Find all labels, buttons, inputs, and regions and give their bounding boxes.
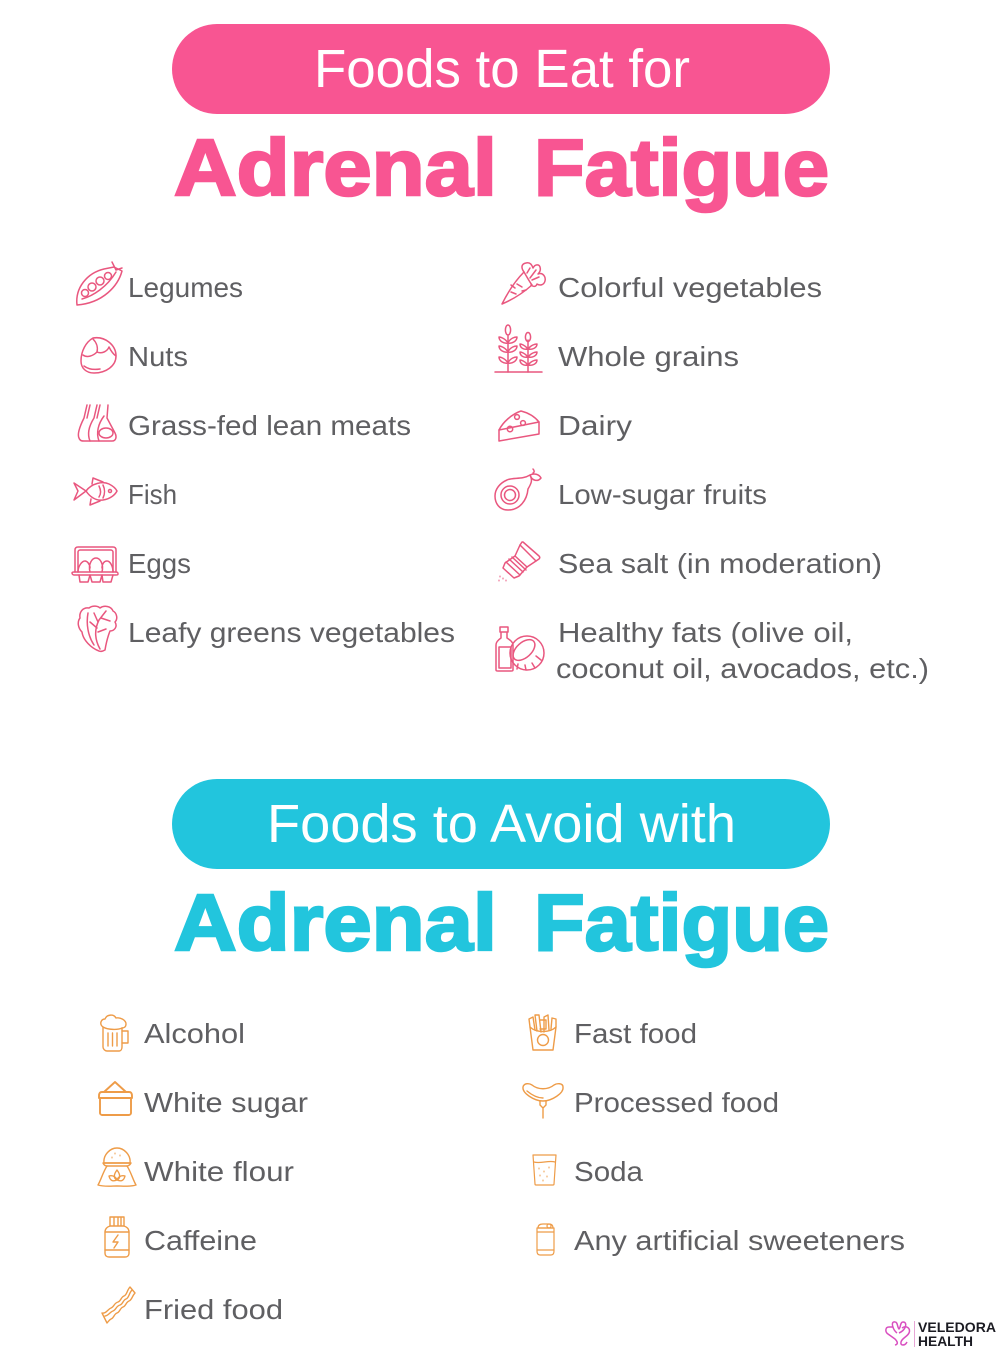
- item: fish: [74, 478, 177, 510]
- item: nuts: [81, 338, 188, 373]
- item: whole grains: Whole grains: [558, 341, 739, 372]
- icon: bacon: [102, 1287, 135, 1323]
- item: colorful vegetables: Colorful vegetables: [558, 272, 822, 303]
- item: white sugar: [99, 1082, 308, 1118]
- item: legumes: Legumes: [128, 272, 243, 303]
- item: white flour: White flour: [144, 1156, 294, 1187]
- item: fish: Fish: [128, 479, 177, 510]
- item: low-sugar fruits: Low-sugar fruits: [558, 479, 767, 510]
- item: artificial sweeteners: Any artificial sweeteners: [574, 1225, 905, 1256]
- item: leafy greens vegetables: [78, 606, 455, 651]
- text: logo wordmark: VELEDORA: [918, 1319, 996, 1335]
- divider: [914, 1321, 916, 1347]
- heading pill: foods to eat: [172, 24, 830, 114]
- item: alcohol: [101, 1015, 245, 1051]
- icon: cheese wedge: [499, 411, 539, 441]
- text: logo wordmark: HEALTH: [918, 1333, 973, 1349]
- title: adrenal fatigue blue: Fatigue: [534, 878, 829, 967]
- heading pill: foods to avoid: [172, 779, 830, 869]
- icon: soda glass: [533, 1155, 556, 1185]
- logo: Veledora Health: [886, 1319, 996, 1349]
- item: fast food: [529, 1015, 697, 1050]
- icon: fries box: [529, 1015, 556, 1050]
- icon: sausage on fork: [523, 1084, 563, 1118]
- item: caffeine: Caffeine: [144, 1225, 257, 1256]
- text: healthy fats label: Healthy fats (olive oil,: [558, 617, 853, 648]
- item: healthy fats: [496, 617, 929, 684]
- item: soda: Soda: [574, 1156, 643, 1187]
- item: white flour: [98, 1148, 294, 1187]
- panel: foods to eat: [72, 24, 929, 684]
- item: sea salt: [499, 542, 882, 581]
- icon: egg carton: [72, 547, 118, 582]
- icon: oil bottle and coconut: [496, 627, 544, 671]
- item: eggs: Eggs: [128, 548, 191, 579]
- icon: pea pod: [77, 262, 122, 305]
- item: processed food: Processed food: [574, 1087, 779, 1118]
- item: nuts: Nuts: [128, 341, 188, 372]
- item: whole grains: [495, 325, 739, 372]
- item: alcohol: Alcohol: [144, 1018, 245, 1049]
- item: dairy: [499, 410, 632, 441]
- item: fast food: Fast food: [574, 1018, 697, 1049]
- icon: lettuce leaf: [78, 606, 117, 651]
- icon: sugar box: [99, 1082, 132, 1115]
- item: dairy: Dairy: [558, 410, 632, 441]
- icon: sweetener jar: [537, 1224, 554, 1255]
- item: colorful vegetables: [502, 263, 822, 304]
- icon: logo mark: [886, 1322, 909, 1345]
- item: fried food: Fried food: [144, 1294, 283, 1325]
- item: sea salt: Sea salt (in moderation): [558, 548, 882, 579]
- item: fried food: [102, 1287, 283, 1325]
- text: logo wordmark: [918, 1319, 996, 1349]
- item: white sugar: White sugar: [144, 1087, 308, 1118]
- icon: hazelnut: [81, 338, 116, 373]
- item: low-sugar fruits: [495, 469, 767, 510]
- icon: fish: [74, 478, 117, 505]
- title: adrenal fatigue pink: Adrenal: [174, 123, 497, 212]
- item: grass-fed lean meats: Grass-fed lean meats: [128, 410, 411, 441]
- icon: wheat stalks: [495, 325, 542, 372]
- item: soda: [533, 1155, 643, 1187]
- item: grass-fed lean meats: [78, 405, 411, 441]
- title: adrenal fatigue pink: [174, 123, 829, 212]
- title: adrenal fatigue blue: [174, 878, 829, 967]
- item: caffeine: [105, 1217, 257, 1257]
- icon: avocado: [495, 469, 541, 510]
- heading pill: foods to eat: Foods to Eat for: [314, 39, 690, 99]
- icon: flour sack: [98, 1148, 136, 1186]
- heading pill: foods to avoid: Foods to Avoid with: [267, 794, 736, 854]
- icon: salt shaker: [499, 542, 540, 581]
- icon: caffeine pill bottle: [105, 1217, 129, 1257]
- text: healthy fats label: [556, 617, 929, 684]
- title: adrenal fatigue pink: Fatigue: [534, 123, 829, 212]
- item: eggs: [72, 547, 191, 582]
- text: healthy fats label: coconut oil, avocados, etc.): [556, 653, 929, 684]
- icon: rack of meat: [78, 405, 116, 441]
- panel: foods to avoid: [98, 779, 905, 1325]
- icon: carrot: [502, 263, 545, 304]
- item: processed food: [523, 1084, 779, 1118]
- icon: beer mug: [101, 1015, 128, 1051]
- item: legumes: [77, 262, 243, 305]
- item: leafy greens vegetables: Leafy greens vegetables: [128, 617, 455, 648]
- title: adrenal fatigue blue: Adrenal: [174, 878, 497, 967]
